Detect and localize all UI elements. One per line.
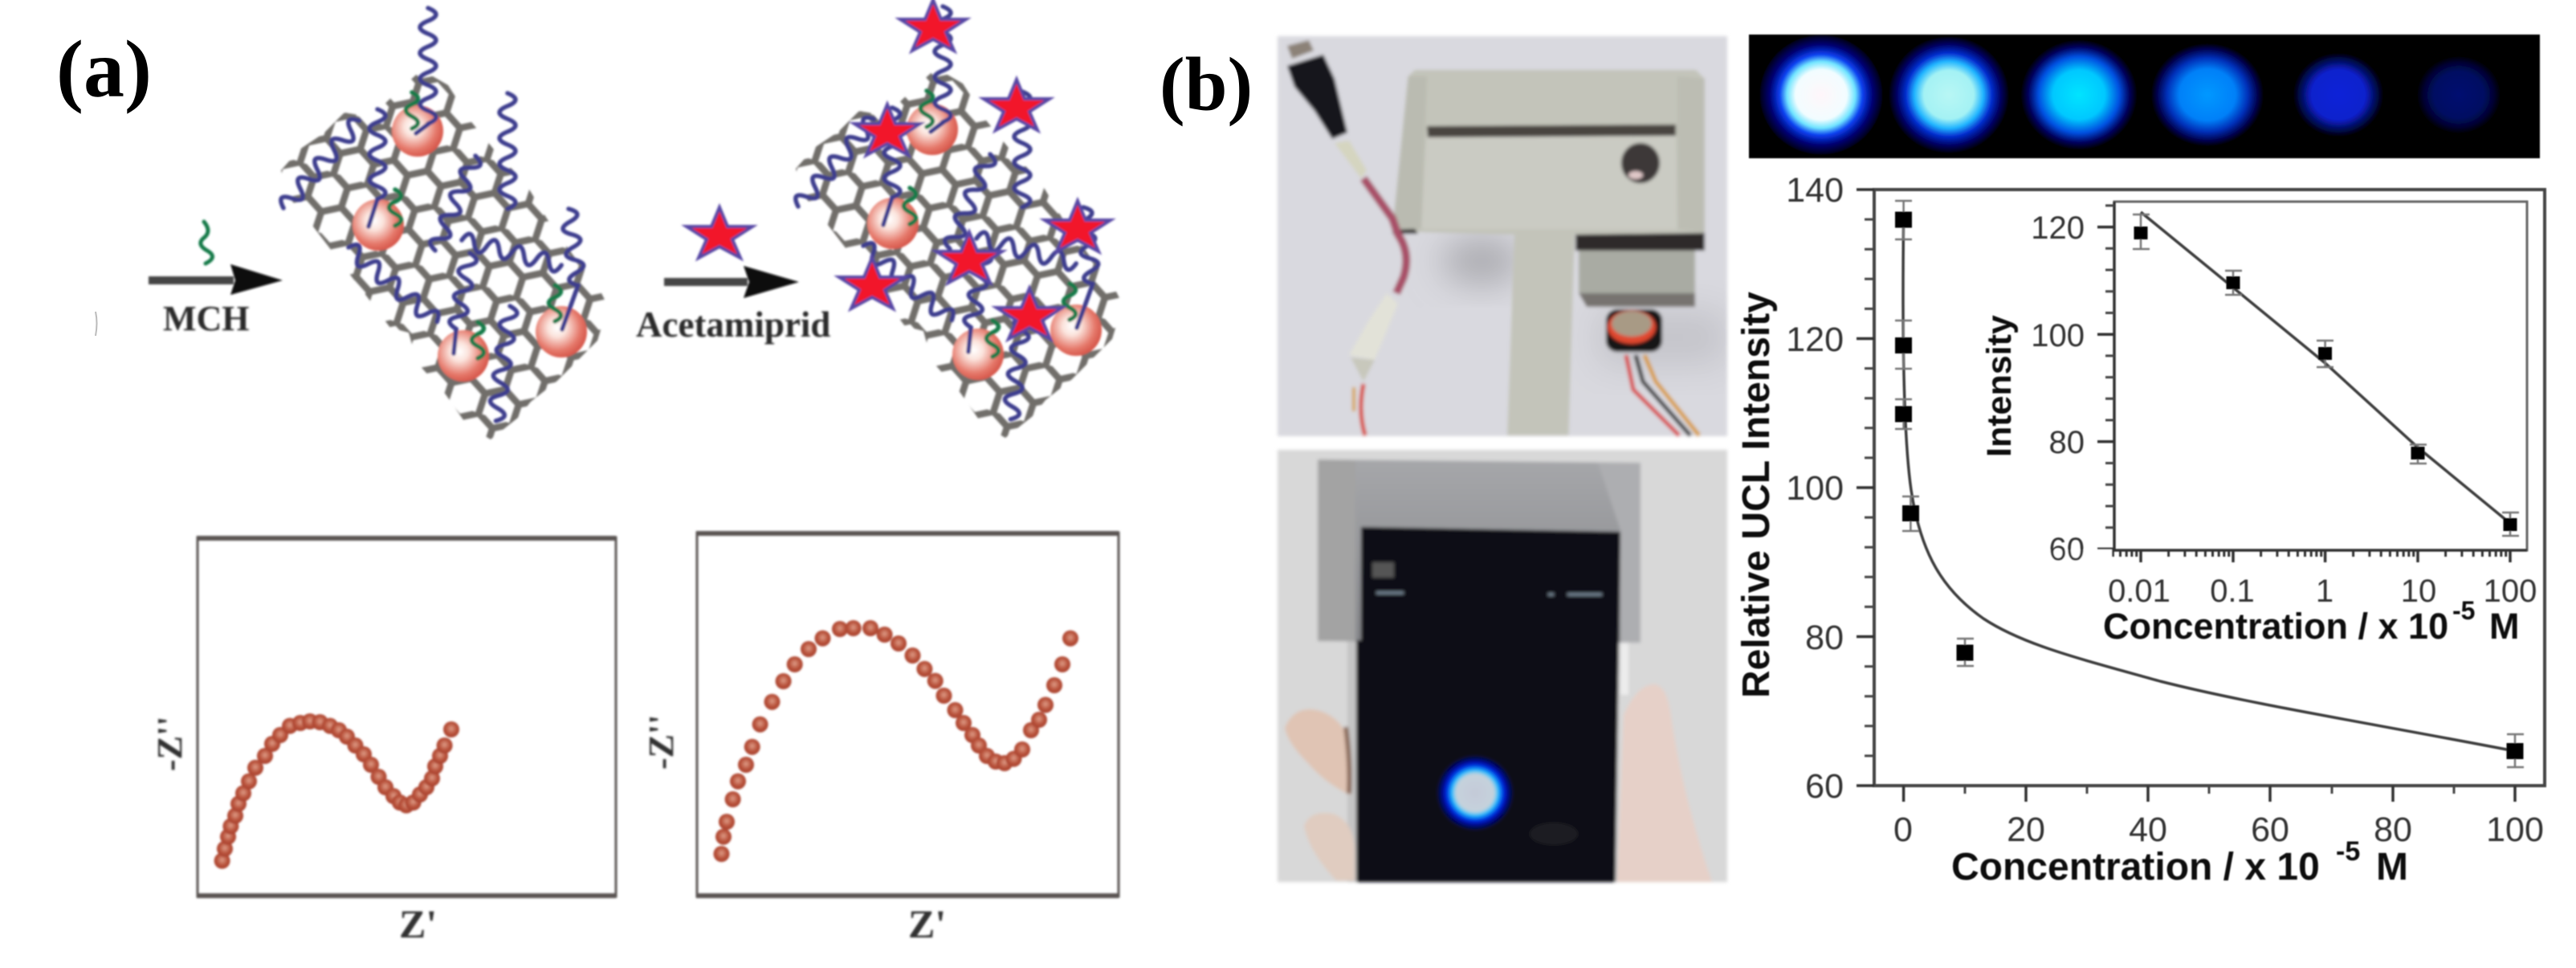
x tick labels: 40 [2129,811,2167,849]
x tick labels: 100 [2486,811,2544,849]
y tick labels: 60 [1805,767,1844,806]
x tick labels: 60 [2251,811,2289,849]
inset x tick labels [2108,574,2537,609]
panel label (b): (b) [1160,42,1253,127]
inset x axis title [2103,596,2520,647]
x axis title: -5 [2336,836,2360,867]
y axis title: Relative UCL Intensity [1735,292,1778,698]
inset fit line [2141,212,2510,524]
inset data points [2134,227,2517,531]
inset x tick labels: 0.01 [2108,574,2170,609]
error bars [1895,201,2524,767]
inset error bars [2133,214,2519,536]
panel (b): smartphone upconversion luminescence detection [1160,35,2545,888]
panel (a): electrochemical aptasensor [56,0,1133,946]
y tick labels: 120 [1786,321,1844,359]
acetamiprid step: star, arrow and label: Acetamiprid [636,304,830,345]
x tick labels [1893,811,2544,849]
inset y tick labels: 100 [2031,318,2085,353]
inset x tick labels: 100 [2484,574,2537,609]
fitted curve [1903,220,2515,751]
inset y tick labels: 80 [2049,425,2085,460]
x tick labels: 20 [2007,811,2045,849]
photo: smartphone with luminescent spot [1278,450,1727,882]
inset axes frame [2114,202,2527,550]
inset y tick labels: 60 [2049,532,2085,567]
x axis title: M [2376,846,2408,888]
x axis title: Concentration / x 10 [1951,846,2320,888]
inset x tick labels: 10 [2401,574,2436,609]
x tick labels: 80 [2374,811,2412,849]
Nyquist plot 1: Z' [399,901,437,946]
inset x tick labels: 1 [2316,574,2333,609]
y tick labels: 140 [1786,171,1844,210]
acetamiprid step: star, arrow and label [636,207,830,345]
Nyquist plot 1: -Z'' [150,717,190,771]
axes frame [1874,190,2545,786]
graphene sheet with nanoparticles and aptamer strands [273,8,618,450]
x tick labels: 0 [1893,811,1913,849]
data points [1895,212,2523,759]
y tick labels: 100 [1786,469,1844,508]
x axis title [1951,836,2408,888]
inset x tick labels: 0.1 [2210,574,2255,609]
inset x axis title: Concentration / x 10 [2103,606,2448,647]
Nyquist plot 2: Z' [908,901,946,946]
panel label (a): (a) [56,24,152,115]
y tick labels: 80 [1805,619,1844,657]
Nyquist plot 2: -Z'' [642,715,681,770]
MCH step: strand, arrow and label [149,222,283,338]
inset x axis title: -5 [2452,596,2475,625]
inset x axis title: M [2489,606,2520,647]
inset y axis title: Intensity [1980,315,2019,457]
Nyquist plot 1 [150,537,616,946]
main chart: relative UCL intensity vs concentration [1735,171,2545,888]
luminescence intensity strip [1749,35,2540,158]
inset y tick labels [2031,210,2085,567]
MCH step: strand, arrow and label: MCH [163,299,250,338]
inset chart: intensity vs log concentration [1980,202,2537,647]
inset y tick labels: 120 [2031,210,2085,246]
photo: 3D-printed device [1278,36,1727,436]
Nyquist plot 2 [642,533,1119,946]
y tick labels [1786,171,1844,806]
graphene sheet with acetamiprid stars bound [788,0,1133,448]
